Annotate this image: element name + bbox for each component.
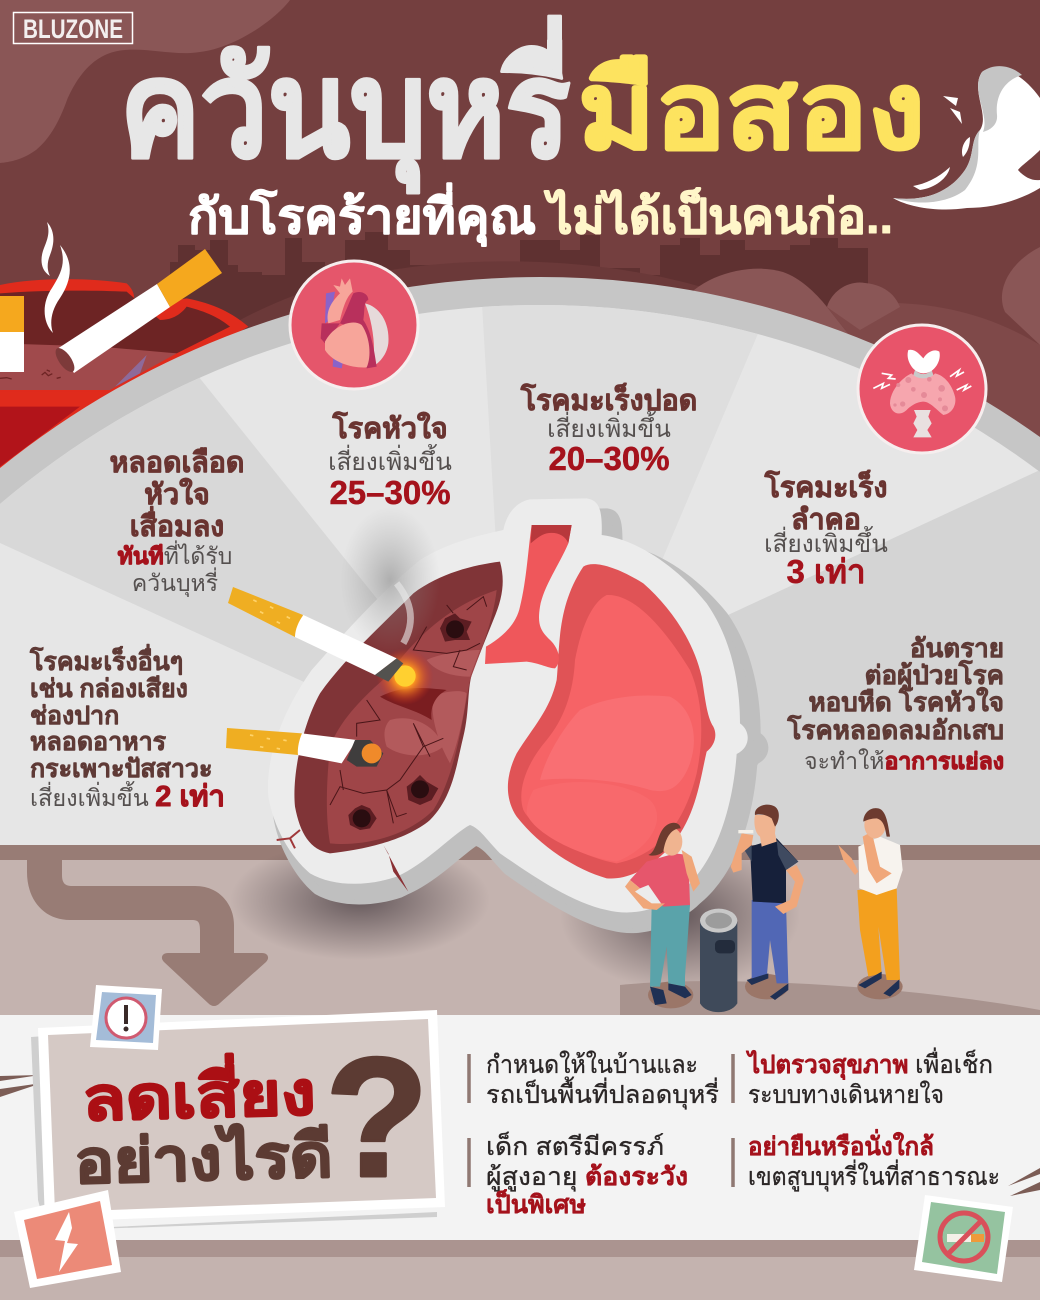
tip 3: เป็นพิเศษ xyxy=(486,1189,586,1219)
people xyxy=(625,805,903,1012)
lower stripe xyxy=(0,1240,1040,1257)
tip 1: กำหนดให้ในบ้านและ xyxy=(486,1050,698,1079)
icon: white smoke swoosh xyxy=(893,66,1040,210)
text: danger to patients: จะทำให้อาการแย่ลง xyxy=(804,748,1004,774)
text: heart disease xyxy=(328,411,452,511)
cigarette 1 xyxy=(228,587,403,682)
right hill left xyxy=(680,269,857,345)
ashtray xyxy=(0,279,248,473)
trachea top shade xyxy=(531,525,572,543)
text: blood vessels: ทันทีที่ได้รับ xyxy=(118,540,232,569)
tip 3: เด็ก สตรีมีครรภ์ xyxy=(486,1131,664,1161)
text: danger to patients: อันตราย xyxy=(910,633,1004,663)
icon: thyroid circle xyxy=(858,325,986,453)
cigarette on ashtray xyxy=(52,249,222,375)
bin xyxy=(700,909,737,1012)
cigarette left edge xyxy=(0,296,24,372)
text: blood vessels xyxy=(110,447,244,597)
arc inner xyxy=(0,305,1040,860)
right lung inner xyxy=(521,595,701,863)
right lung lower lobe xyxy=(527,782,657,862)
woman left xyxy=(625,823,700,1005)
text: danger to patients: หอบหืด โรคหัวใจ xyxy=(808,686,1004,717)
left lung lighter folds xyxy=(384,650,480,763)
text: other cancers: ช่องปาก xyxy=(30,702,119,730)
heading อย่างไรดี: อย่างไรดี xyxy=(74,1120,333,1196)
tip 1 xyxy=(486,1050,719,1110)
burn glow xyxy=(377,648,433,705)
tip 3: ผู้สูงอายุ ต้องระวัง xyxy=(486,1163,688,1192)
wedges xyxy=(0,378,1040,845)
burn mark xyxy=(380,688,447,720)
cigarette 2 xyxy=(226,728,383,767)
lung floor shadow xyxy=(230,840,490,960)
brand logo: BLUZONE xyxy=(23,14,123,44)
right hill far xyxy=(1002,247,1040,345)
glow core xyxy=(394,665,416,687)
text: other cancers: หลอดอาหาร xyxy=(30,728,167,756)
text: lung cancer: 20–30% xyxy=(548,440,670,477)
left lung surface xyxy=(327,590,497,844)
text: heart disease: โรคหัวใจ xyxy=(331,411,448,445)
trachea xyxy=(485,525,572,668)
text: other cancers: เสี่ยงเพิ่มขึ้น 2 เท่า xyxy=(30,781,225,813)
right lung lobe xyxy=(540,695,694,791)
question mark: ? xyxy=(325,1023,429,1213)
lungs xyxy=(226,498,768,933)
ash specks xyxy=(0,370,61,379)
smoke haze xyxy=(340,507,440,653)
man middle xyxy=(731,805,804,1000)
text: throat cancer xyxy=(764,469,888,590)
title part 1: ควันบุหรี่ xyxy=(120,15,570,193)
ash surface xyxy=(0,343,177,390)
text: throat cancer: ลำคอ xyxy=(791,504,861,536)
text: other cancers: เช่น กล่องเสียง xyxy=(30,675,188,703)
speed lines left xyxy=(0,1075,42,1097)
city skyline xyxy=(170,232,868,330)
ashtray interior xyxy=(0,291,230,353)
person shadow right xyxy=(857,974,903,999)
text: blood vessels: หลอดเลือด xyxy=(110,447,244,479)
white lower panel xyxy=(0,1015,1040,1240)
subtitle part 2: ไม่ได้เป็นคนก่อ.. xyxy=(543,187,893,244)
person shadow middle xyxy=(745,974,788,999)
text: throat cancer: 3 เท่า xyxy=(786,553,866,590)
icon: heart circle xyxy=(290,261,418,389)
text: lung cancer xyxy=(520,382,697,477)
tip 1: รถเป็นพื้นที่ปลอดบุหรี่ xyxy=(486,1076,719,1110)
text: heart disease: เสี่ยงเพิ่มขึ้น xyxy=(328,444,452,476)
text: danger to patients: ต่อผู้ป่วยโรค xyxy=(865,659,1004,692)
hole halos xyxy=(348,613,472,830)
text: blood vessels: ควันบุหรี่ xyxy=(132,567,218,597)
right hill small xyxy=(827,282,900,330)
cracks xyxy=(330,597,487,823)
icon: lightning card xyxy=(14,1190,121,1288)
text: blood vessels: เสื่อมลง xyxy=(130,506,224,543)
text: other cancers xyxy=(29,644,225,813)
icon: no smoking card xyxy=(914,1195,1013,1282)
text: other cancers: กระเพาะปัสสาวะ xyxy=(30,755,212,783)
person shadow left xyxy=(648,982,693,1008)
text: danger to patients: โรคหลอดลมอักเสบ xyxy=(786,714,1004,745)
tip 4 xyxy=(748,1129,1000,1192)
floor stripe xyxy=(0,845,1040,860)
subtitle part 1: กับโรคร้ายที่คุณ xyxy=(188,182,536,247)
tip 2: ไปตรวจสุขภาพ เพื่อเช็ก xyxy=(745,1047,993,1081)
arrow xyxy=(27,845,268,1006)
lung shadow xyxy=(273,508,768,933)
tip 2: ระบบทางเดินหายใจ xyxy=(748,1080,944,1109)
left lung dark cavity xyxy=(294,562,503,853)
dividers xyxy=(469,1054,733,1187)
floor front patch xyxy=(620,981,1040,1015)
text: lung cancer: โรคมะเร็งปอด xyxy=(520,382,697,417)
red band xyxy=(0,392,110,407)
top-left blob xyxy=(0,0,290,163)
text: other cancers: โรคมะเร็งอื่นๆ xyxy=(29,644,183,676)
title part 2: มือสอง xyxy=(578,50,925,171)
bottom crack xyxy=(383,845,408,892)
smoke curls xyxy=(42,222,70,333)
text: lung cancer: เสี่ยงเพิ่มขึ้น xyxy=(547,411,671,443)
dark red lower xyxy=(0,407,80,467)
tip 4: เขตสูบบุหรี่ในที่สาธารณะ xyxy=(748,1159,1000,1192)
text: danger to patients xyxy=(786,633,1004,774)
card xyxy=(38,1010,445,1222)
right dark hill xyxy=(827,303,1040,445)
text: throat cancer: โรคมะเร็ง xyxy=(764,469,887,504)
woman right xyxy=(838,808,903,997)
card shadow xyxy=(31,1035,437,1230)
hill behind arc xyxy=(240,261,800,330)
bottom band xyxy=(0,1257,1040,1300)
text: heart disease: 25–30% xyxy=(329,474,451,511)
tip 2 xyxy=(745,1047,993,1109)
purple smudge xyxy=(115,355,147,387)
right lung cavity xyxy=(508,564,715,879)
text: blood vessels: หัวใจ xyxy=(144,477,210,511)
heading ลดเสี่ยง: ลดเสี่ยง xyxy=(81,1051,316,1133)
floor xyxy=(0,860,1040,1020)
lung white body xyxy=(268,498,748,912)
tip 4: อย่ายืนหรือนั่งใกล้ xyxy=(748,1129,934,1161)
speed lines right xyxy=(1008,1168,1040,1196)
smoke wisp xyxy=(397,583,411,643)
outer arc band xyxy=(0,277,1040,860)
icon: warning card xyxy=(90,985,162,1050)
floor shadow 2 xyxy=(560,840,800,990)
tip 3 xyxy=(486,1131,688,1219)
text: throat cancer: เสี่ยงเพิ่มขึ้น xyxy=(764,526,888,558)
holes xyxy=(353,620,464,827)
left crack xyxy=(277,830,300,848)
